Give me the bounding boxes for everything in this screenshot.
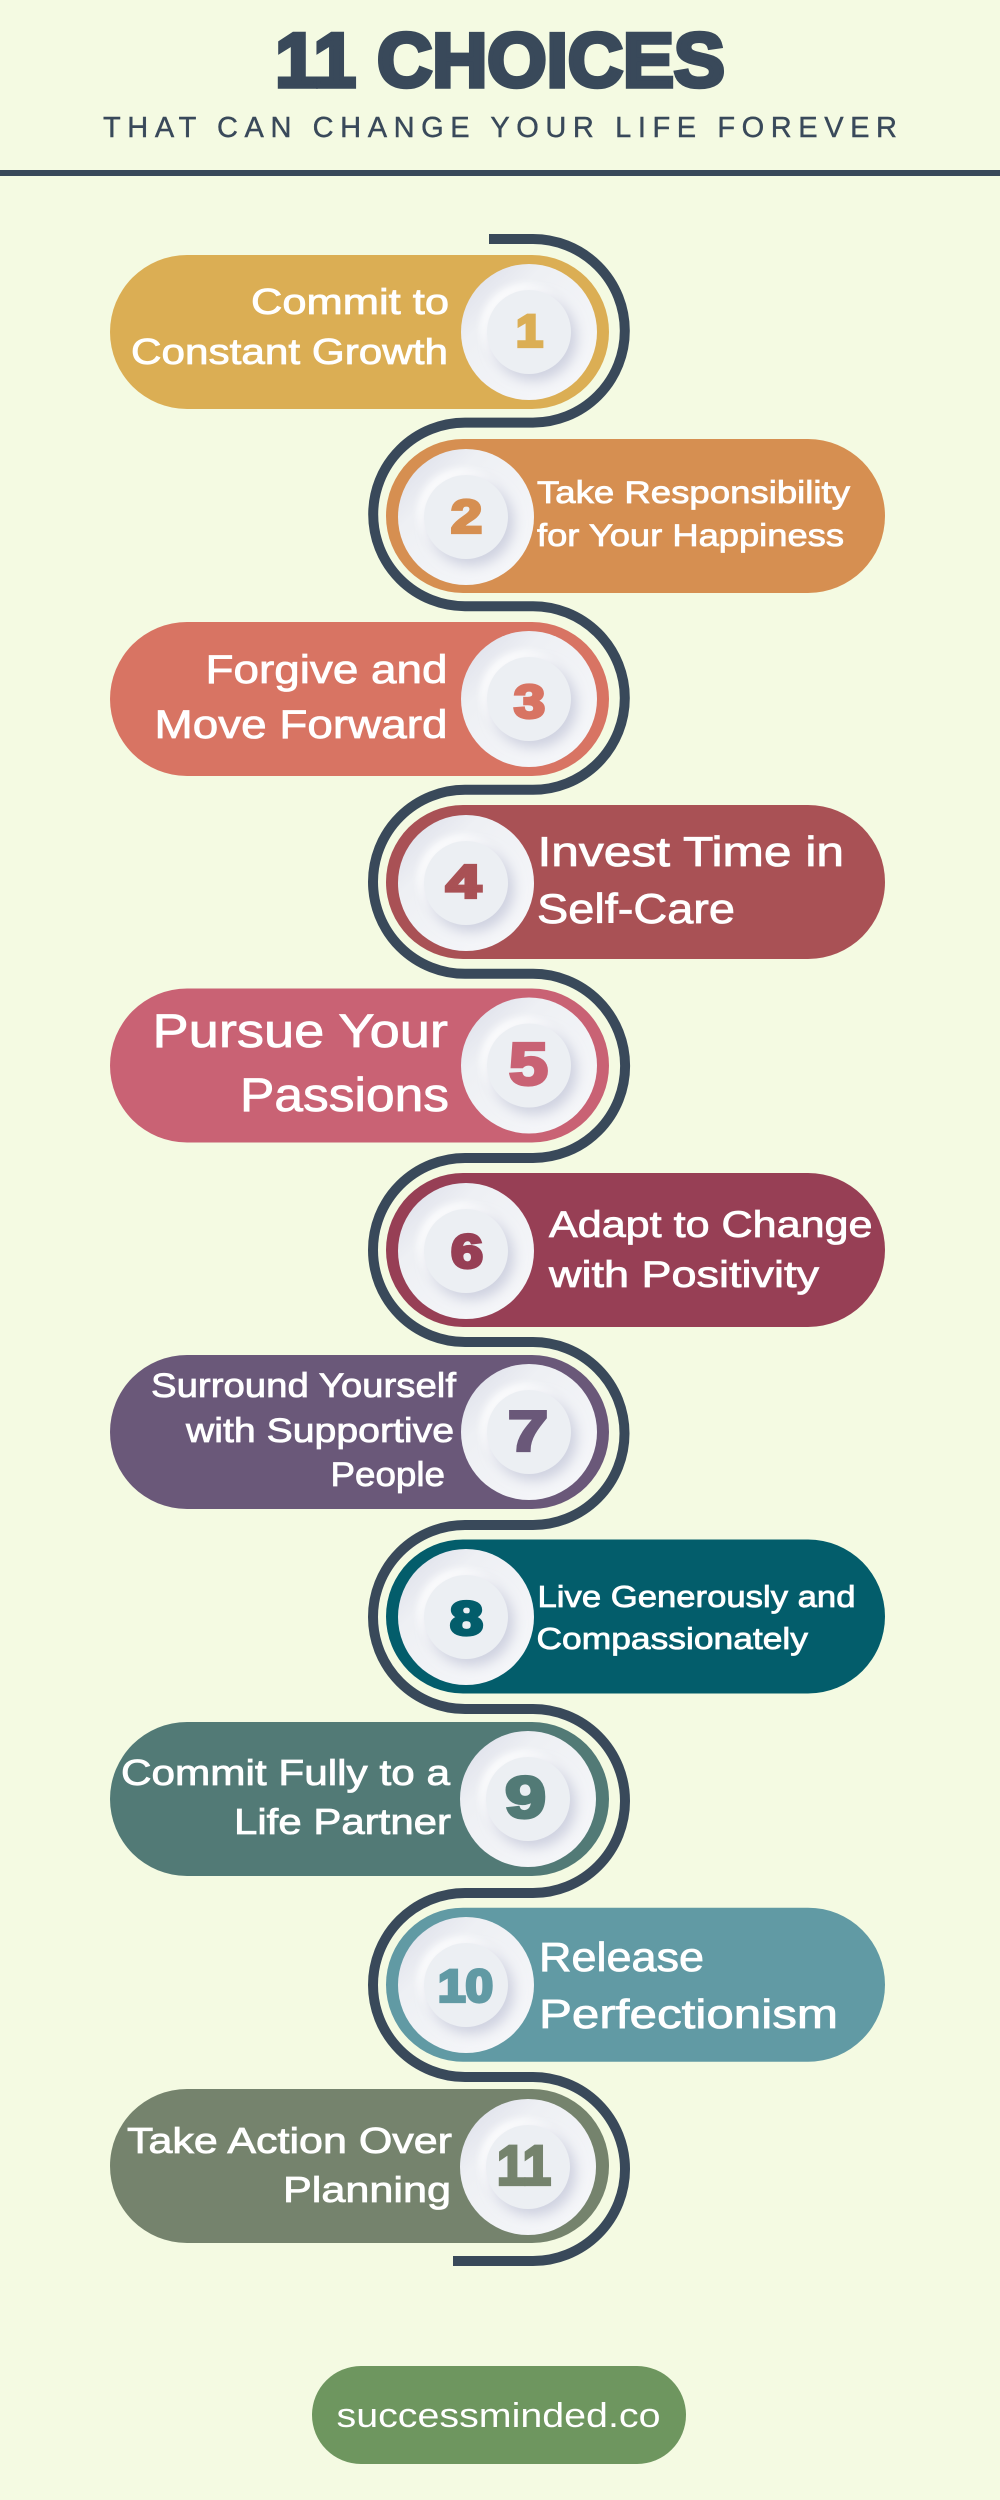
- label 8: [536, 1579, 856, 1656]
- label 10: Release: [539, 1934, 704, 1980]
- label 4: [537, 828, 844, 932]
- label 6: [548, 1203, 872, 1295]
- label 3: Move Forward: [154, 703, 448, 747]
- label 10: [539, 1934, 838, 2037]
- label 9: [121, 1752, 451, 1842]
- label 3: Forgive and: [206, 648, 448, 692]
- number 8: 8: [450, 1592, 483, 1644]
- panel: choice 6: [386, 1173, 885, 1327]
- plate 6: [398, 1183, 534, 1319]
- label 7: [151, 1367, 456, 1494]
- panel: choice 9: [110, 1722, 609, 1876]
- number 1: 1: [516, 306, 543, 356]
- label 5: Passions: [240, 1068, 449, 1121]
- pill 8: [386, 1540, 885, 1694]
- pill 4: [386, 805, 885, 959]
- plate 1: [461, 264, 597, 400]
- label 2: for Your Happiness: [537, 517, 844, 553]
- plate 10: [398, 1917, 534, 2053]
- pill 3: [110, 622, 609, 776]
- plate 3: [461, 631, 597, 767]
- number 11: 11: [497, 2134, 551, 2196]
- pill 7: [110, 1355, 609, 1509]
- label 4: Invest Time in: [538, 828, 844, 875]
- number 2: 2: [451, 490, 482, 542]
- label 8: Live Generously and: [538, 1579, 856, 1614]
- pill 2: [386, 439, 885, 593]
- footer badge: [312, 2366, 686, 2464]
- panel: choice 5: [110, 988, 609, 1142]
- label 1: [131, 281, 449, 372]
- plate 8: [398, 1549, 534, 1685]
- pill 11: [110, 2089, 609, 2243]
- panel: choice 1: [110, 255, 609, 409]
- label 2: Take Responsibility: [537, 474, 850, 510]
- pill 5: [110, 988, 609, 1142]
- panel: choice 3: [110, 622, 609, 776]
- panel: choice 7: [110, 1355, 609, 1509]
- plate 2: [398, 449, 534, 585]
- plate 5: [461, 998, 597, 1134]
- number 5: 5: [509, 1032, 548, 1098]
- label 8: Compassionately: [536, 1621, 809, 1656]
- panel: choice 8: [386, 1540, 885, 1694]
- number 7: 7: [508, 1400, 548, 1464]
- number 3: 3: [514, 676, 545, 728]
- label 5: Pursue Your: [152, 1004, 448, 1057]
- subtitle: THAT CAN CHANGE YOUR LIFE FOREVER: [103, 112, 897, 144]
- label 5: [152, 1004, 449, 1121]
- panel: choice 2: [386, 439, 885, 593]
- label 1: Commit to: [251, 281, 449, 322]
- label 7: with Supportive: [185, 1412, 454, 1450]
- label 11: [127, 2120, 452, 2210]
- label 7: Surround Yourself: [151, 1367, 456, 1405]
- label 7: People: [330, 1456, 445, 1494]
- panel: choice 4: [386, 805, 885, 959]
- pill 6: [386, 1173, 885, 1327]
- panel: choice 10: [386, 1908, 885, 2062]
- pill 1: [110, 255, 609, 409]
- plate 7: [461, 1364, 597, 1500]
- label 9: Life Partner: [234, 1801, 451, 1842]
- label 3: [154, 648, 448, 747]
- label 11: Planning: [283, 2169, 451, 2210]
- pill 10: [386, 1908, 885, 2062]
- label 1: Constant Growth: [131, 331, 448, 372]
- plate 9: [460, 1731, 596, 1867]
- number 9: 9: [505, 1766, 546, 1830]
- title: 11 CHOICES: [275, 19, 725, 104]
- number 6: 6: [451, 1224, 483, 1278]
- number 4: 4: [446, 856, 482, 908]
- label 6: Adapt to Change: [549, 1203, 872, 1245]
- winding connector line: [373, 239, 625, 2261]
- label 10: Perfectionism: [539, 1991, 838, 2037]
- pill 9: [110, 1722, 609, 1876]
- header: [103, 19, 897, 144]
- panel: choice 11: [110, 2089, 609, 2243]
- footer url: successminded.co: [336, 2397, 660, 2435]
- label 2: [537, 474, 850, 553]
- label 4: Self-Care: [537, 885, 735, 932]
- plate 4: [398, 815, 534, 951]
- label 11: Take Action Over: [127, 2120, 452, 2161]
- plate 11: [460, 2099, 596, 2235]
- number 10: 10: [438, 1960, 493, 2012]
- footer pill: [312, 2366, 686, 2464]
- label 9: Commit Fully to a: [121, 1752, 451, 1793]
- header divider: [0, 170, 1000, 176]
- label 6: with Positivity: [548, 1253, 819, 1295]
